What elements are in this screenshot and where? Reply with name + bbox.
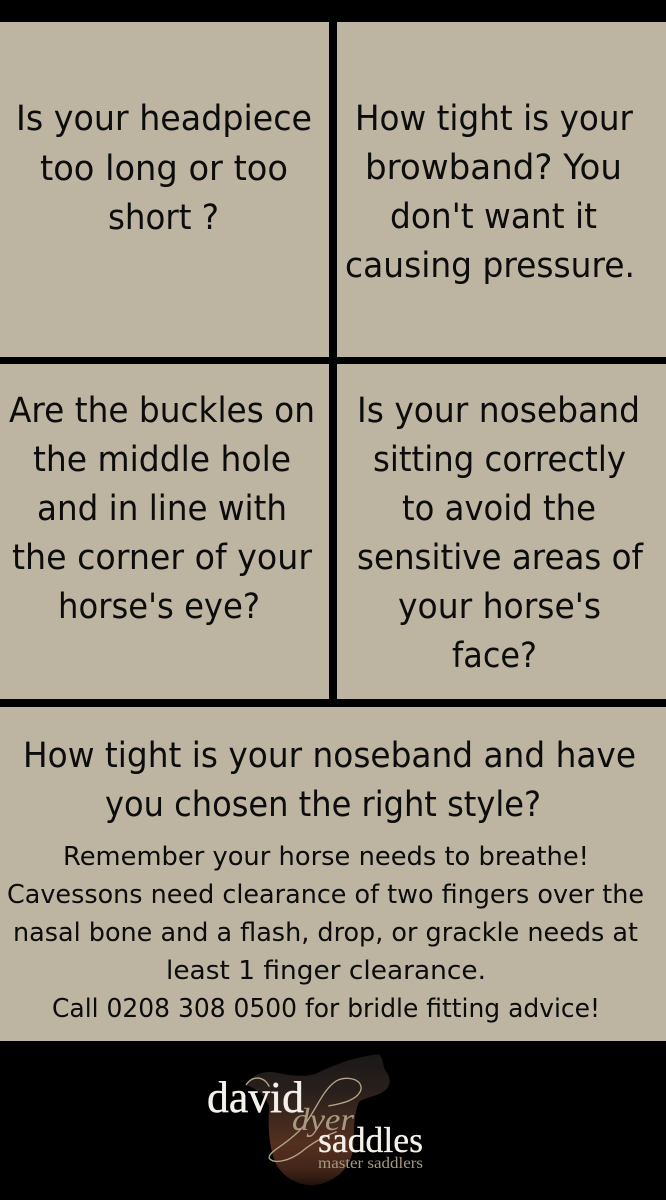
text: browband question: don't want it	[390, 197, 597, 237]
text: clearance advice	[7, 842, 644, 1024]
text: noseband position question	[357, 391, 644, 676]
panel: noseband tightness	[0, 707, 666, 1041]
text: headpiece question: too long or too	[40, 149, 288, 189]
text: clearance advice: Remember your horse needs to breathe!	[63, 842, 589, 872]
panel: browband	[337, 22, 666, 357]
text: browband question: causing pressure.	[345, 246, 635, 286]
logo: David Dyer Saddles	[207, 1054, 423, 1185]
icon: script swirl	[246, 1078, 361, 1161]
text: headpiece question: short ?	[108, 198, 219, 238]
heading: noseband tightness: How tight is your noseband and have	[23, 736, 636, 776]
icon: saddle	[246, 1054, 390, 1185]
panel: noseband position	[337, 364, 666, 699]
text: browband question	[345, 99, 635, 286]
panel: buckles	[0, 364, 329, 699]
text: saddles: saddles	[318, 1120, 423, 1160]
text: buckles question: Are the buckles on	[9, 391, 315, 431]
text: buckles question: and in line with	[37, 489, 287, 529]
text: buckles question: horse's eye?	[58, 587, 260, 627]
text: buckles question: the corner of your	[12, 538, 313, 578]
text: noseband position question: face?	[452, 636, 537, 676]
heading: noseband tightness: you chosen the right style?	[105, 785, 541, 825]
panel: headpiece	[0, 22, 329, 357]
text: noseband position question: sitting correctly	[373, 440, 626, 480]
text: noseband position question: to avoid the	[402, 489, 596, 529]
text: clearance advice: nasal bone and a flash, drop, or grackle needs at	[13, 918, 638, 948]
text: browband question: How tight is your	[355, 99, 634, 139]
text: noseband position question: Is your noseband	[357, 391, 640, 431]
text: headpiece question: Is your headpiece	[16, 99, 312, 139]
text: dyer: dyer	[292, 1101, 355, 1137]
text: david: david	[207, 1073, 304, 1122]
heading: noseband tightness	[23, 736, 636, 825]
text: buckles question: the middle hole	[33, 440, 291, 480]
text: headpiece question	[16, 99, 312, 238]
text: master saddlers: master saddlers	[318, 1155, 423, 1172]
text: clearance advice: Call 0208 308 0500 for bridle fitting advice!	[52, 994, 600, 1024]
text: browband question: browband? You	[365, 148, 622, 188]
text: clearance advice: least 1 finger clearance.	[166, 956, 486, 986]
text: noseband position question: your horse's	[398, 587, 601, 627]
text: buckles question	[9, 391, 315, 627]
text: clearance advice: Cavessons need clearance of two fingers over the	[7, 880, 644, 910]
text: noseband position question: sensitive areas of	[357, 538, 644, 578]
